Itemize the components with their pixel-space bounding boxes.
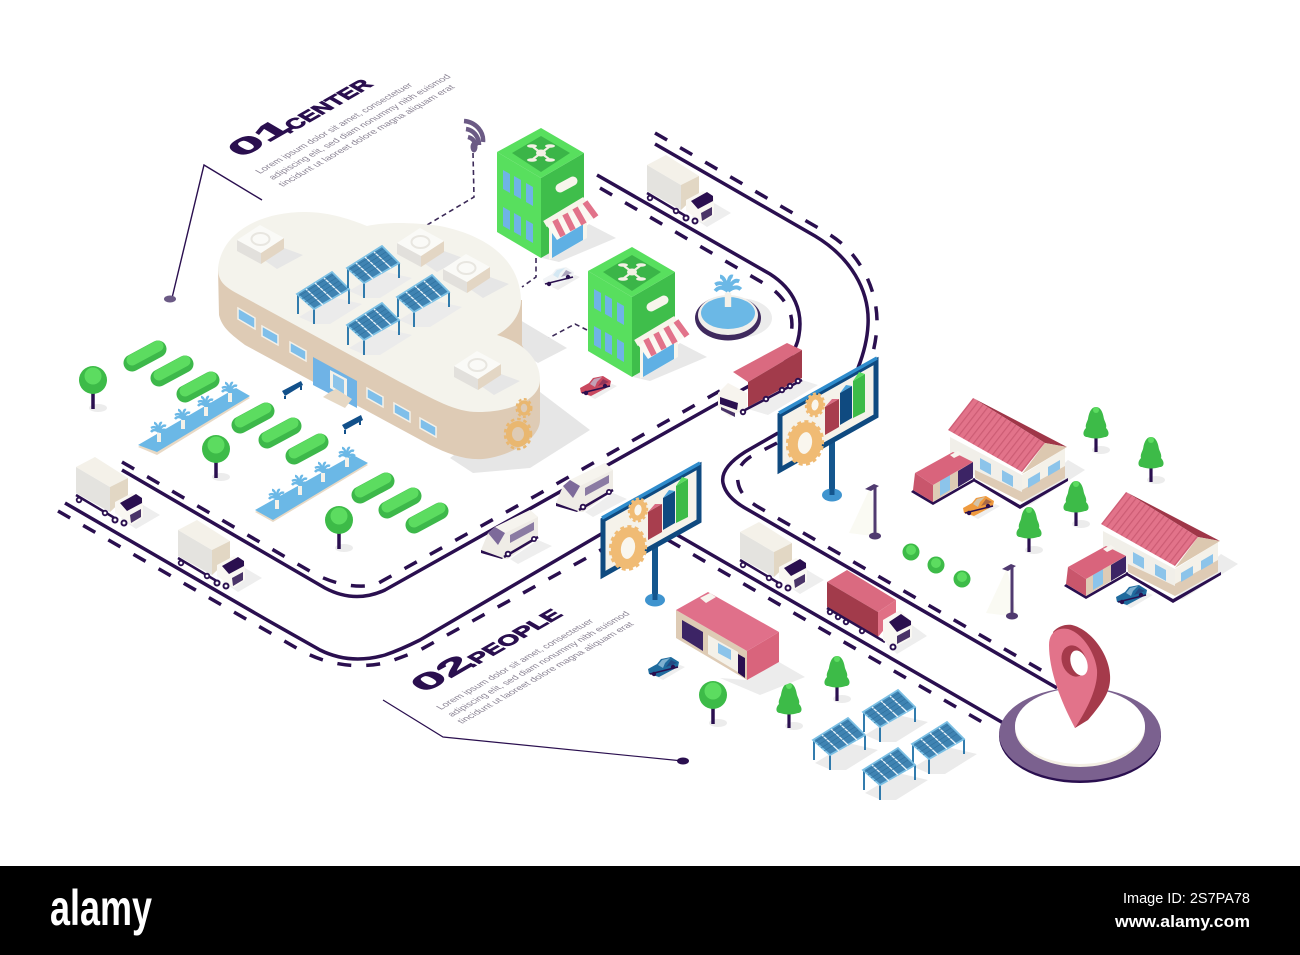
text block: people description: Lorem ipsum dolor sit amet, consectetuer [434, 617, 597, 712]
storage garage [676, 592, 805, 695]
heading: 02 people [402, 606, 568, 697]
street lamps [849, 484, 1018, 620]
fountain [695, 276, 772, 340]
heading: 01 center: .CENTER [274, 76, 379, 137]
vans [481, 463, 627, 564]
text block: people description: tincidunt ut laoreet dolore magna aliquam erat [455, 620, 637, 726]
location pin and platform [999, 625, 1161, 783]
rooftop solar panels [297, 246, 462, 355]
hedges [132, 346, 440, 525]
round trees [79, 366, 727, 727]
footer logo: alamy [50, 880, 152, 936]
heading: 01 center: 01 [219, 115, 300, 162]
leader line: people [383, 700, 689, 764]
heading: 02 people: 02 [402, 651, 481, 697]
footer image id: Image ID: 2S7PA78 [1123, 890, 1250, 907]
white delivery trucks [76, 155, 824, 594]
road network [58, 133, 1057, 724]
wall gears [505, 399, 532, 449]
heading: 02 people: .PEOPLE [457, 606, 568, 671]
text block: center description: adipiscing elit, sed diam nonummy nibh euismod [266, 73, 454, 182]
text block: people description: adipiscing elit, sed diam nonummy nibh euismod [445, 610, 633, 719]
rooftop units [237, 225, 520, 395]
red truck: lower road [827, 570, 927, 654]
red truck: upper road [718, 343, 818, 417]
building entrance [313, 357, 357, 408]
benches [282, 381, 363, 434]
houses [911, 398, 1238, 603]
building: cloud data center [218, 212, 590, 473]
pine trees [776, 407, 1165, 730]
text block: center description: tincidunt ut laoreet dolore magna aliquam erat [276, 83, 458, 189]
heading: 01 center [219, 76, 379, 162]
ponds with palms [138, 383, 368, 522]
green round shrubs [902, 544, 970, 588]
building windows [238, 308, 436, 437]
text block: center description: Lorem ipsum dolor sit amet, consectetuer [253, 81, 416, 176]
billboard: lower [602, 462, 700, 606]
solar panel field [813, 690, 977, 800]
footer bar [0, 866, 1300, 955]
billboard: upper [779, 357, 877, 502]
icon: wifi signal [464, 121, 483, 152]
connector: dashed network links [427, 153, 587, 348]
green office buildings [497, 128, 707, 381]
footer url: www.alamy.com [1114, 912, 1250, 931]
cars [543, 267, 1153, 680]
leader line: center [164, 165, 262, 302]
